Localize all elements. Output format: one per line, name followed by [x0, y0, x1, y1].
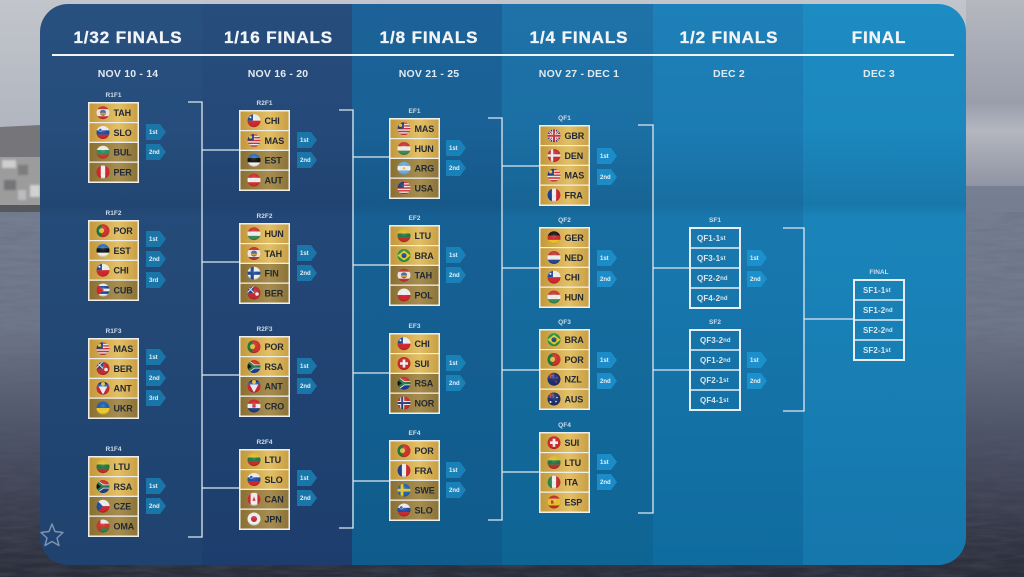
match EF4: SWE: [414, 486, 435, 496]
match R1F1: TAH: [114, 108, 131, 118]
match FINAL: st: [885, 288, 891, 294]
match QF1: MAS: [564, 170, 584, 180]
match FINAL: SF2-1: [863, 346, 885, 355]
match SF1: QF1-1: [697, 234, 720, 243]
match R1F1: BUL: [114, 148, 132, 158]
qualifier badges: EF1: [446, 140, 466, 176]
match EF2: BRA: [414, 251, 434, 261]
match R1F4: LTU: [114, 462, 130, 472]
connector: 1/8 to 1/4: [488, 118, 539, 520]
qualifier badges: QF4: 1st: [600, 460, 609, 466]
qualifier badges: EF2: 2nd: [449, 273, 460, 279]
qualifier badges: EF1: 2nd: [449, 166, 460, 172]
qualifier badges: SF2: 1st: [750, 358, 759, 364]
match QF2: [539, 217, 590, 308]
qualifier badges: R2F2: [297, 245, 317, 281]
qualifier badges: QF1: [597, 148, 617, 185]
match SF1: st: [720, 236, 726, 242]
match FINAL: FINAL: [869, 269, 889, 276]
column band: 1/4 finals: [502, 4, 653, 565]
match QF4: LTU: [564, 458, 581, 468]
match QF3: QF3: [558, 319, 571, 326]
match SF2: st: [723, 378, 729, 384]
match QF4: [539, 422, 590, 513]
qualifier badges: SF2: [747, 352, 767, 389]
qualifier badges: EF3: 2nd: [449, 381, 460, 387]
match FINAL: nd: [885, 308, 893, 314]
match QF2: NED: [564, 253, 584, 263]
heading: final: FINAL: [852, 28, 906, 47]
match FINAL: [854, 269, 904, 360]
match QF3: AUS: [564, 394, 583, 404]
match R2F1: AUT: [264, 175, 283, 185]
match R2F3: ANT: [264, 382, 283, 392]
qualifier badges: EF2: 1st: [449, 253, 458, 259]
match QF4: SUI: [564, 438, 579, 448]
qualifier badges: QF3: [597, 352, 617, 389]
match R1F4: RSA: [114, 482, 133, 492]
match QF1: GBR: [564, 131, 585, 141]
match R2F4: CAN: [264, 494, 284, 504]
match QF1: DEN: [564, 151, 583, 161]
qualifier badges: EF1: 1st: [449, 146, 458, 152]
match SF1: st: [720, 256, 726, 262]
match EF2: EF2: [409, 215, 421, 222]
match R1F4: CZE: [114, 502, 131, 512]
match QF3: [539, 319, 590, 410]
match SF1: [690, 217, 740, 308]
heading: 1/16 finals: 1/16 FINALS: [224, 28, 333, 47]
match R2F3: RSA: [264, 362, 284, 372]
qualifier badges: QF2: 2nd: [600, 277, 611, 283]
match SF2: [690, 319, 740, 410]
match R2F4: R2F4: [257, 439, 273, 446]
match SF1: QF2-2: [697, 274, 720, 283]
match SF1: QF3-1: [697, 254, 720, 263]
connector: 1/2 to final: [783, 228, 853, 411]
heading: 1/32 finals: 1/32 FINALS: [73, 28, 183, 47]
match R2F2: HUN: [264, 229, 284, 239]
match EF3: SUI: [414, 359, 429, 369]
match R2F3: CRO: [264, 401, 284, 411]
match R1F3: BER: [114, 364, 133, 374]
see-through hillside: [354, 169, 966, 211]
qualifier badges: R2F2: 1st: [300, 251, 309, 257]
date: final: DEC 3: [863, 68, 895, 80]
match QF3: POR: [564, 355, 584, 365]
qualifier badges: SF1: 2nd: [750, 277, 761, 283]
match FINAL: nd: [885, 328, 893, 334]
match QF4: ESP: [564, 497, 582, 507]
match EF3: CHI: [414, 339, 430, 349]
column band: final: [803, 4, 966, 565]
match R2F4: LTU: [264, 455, 281, 465]
date: 1/16 finals: NOV 16 - 20: [248, 68, 308, 80]
connector: 1/16 to 1/8: [339, 110, 389, 528]
icon: star logo: [41, 524, 63, 546]
column band: 1/2 finals: [653, 4, 803, 565]
qualifier badges: R1F3: [146, 349, 166, 406]
heading: 1/8 finals: 1/8 FINALS: [380, 28, 478, 47]
match EF4: [389, 430, 440, 521]
qualifier badges: QF3: 1st: [600, 358, 609, 364]
match SF2: QF3-2: [700, 336, 723, 345]
header rule: [52, 54, 954, 56]
match EF4: FRA: [414, 466, 433, 476]
qualifier badges: SF1: 1st: [750, 256, 759, 262]
match FINAL: SF2-2: [863, 326, 885, 335]
match EF3: EF3: [409, 323, 421, 330]
match R1F1: R1F1: [106, 92, 122, 99]
match SF2: QF2-1: [700, 376, 723, 385]
match R1F1: SLO: [114, 128, 132, 138]
qualifier badges: EF4: 2nd: [449, 488, 460, 494]
match R1F3: R1F3: [106, 328, 122, 335]
match R2F1: CHI: [264, 116, 280, 126]
match R2F2: [239, 213, 290, 304]
match EF2: [389, 215, 440, 306]
qualifier badges: EF3: 1st: [449, 361, 458, 367]
qualifier badges: R1F3: 2nd: [149, 376, 160, 382]
match R1F4: OMA: [114, 521, 135, 531]
date: 1/8 finals: NOV 21 - 25: [399, 68, 459, 80]
match R1F1: PER: [114, 167, 132, 177]
match R2F2: TAH: [264, 249, 282, 259]
match QF2: GER: [564, 233, 584, 243]
match R2F3: R2F3: [257, 326, 273, 333]
match FINAL: st: [885, 348, 891, 354]
column band: 1/16 finals: [202, 4, 352, 565]
match EF2: POL: [414, 290, 433, 300]
qualifier badges: R1F1: 2nd: [149, 150, 160, 156]
match R1F4: [88, 446, 139, 537]
qualifier badges: R2F1: 2nd: [300, 158, 311, 164]
match QF1: QF1: [558, 115, 571, 122]
qualifier badges: SF1: [747, 250, 767, 287]
match R2F2: BER: [264, 288, 284, 298]
qualifier badges: R1F2: 1st: [149, 237, 158, 243]
date: 1/4 finals: NOV 27 - DEC 1: [539, 68, 619, 80]
match R2F1: [239, 100, 290, 191]
qualifier badges: R1F4: 2nd: [149, 504, 160, 510]
match QF2: HUN: [564, 292, 584, 302]
qualifier badges: R1F2: [146, 231, 166, 288]
match R1F2: R1F2: [106, 210, 122, 217]
qualifier badges: R2F4: 1st: [300, 476, 309, 482]
heading: 1/2 finals: 1/2 FINALS: [680, 28, 778, 47]
match SF2: QF1-2: [700, 356, 723, 365]
match R1F2: CUB: [114, 285, 133, 295]
qualifier badges: R2F4: [297, 470, 317, 506]
qualifier badges: R1F2: 3rd: [149, 278, 159, 284]
match R1F2: CHI: [114, 266, 129, 276]
qualifier badges: R1F1: [146, 124, 166, 160]
match SF1: nd: [720, 296, 728, 302]
match QF2: QF2: [558, 217, 571, 224]
qualifier badges: QF3: 2nd: [600, 379, 611, 385]
qualifier badges: R2F1: [297, 132, 317, 168]
match R2F1: EST: [264, 156, 282, 166]
match R1F1: [88, 92, 139, 183]
match R1F3: ANT: [114, 384, 132, 394]
match SF1: SF1: [709, 217, 721, 224]
qualifier badges: QF4: 2nd: [600, 480, 611, 486]
qualifier badges: R2F3: 2nd: [300, 384, 311, 390]
qualifier badges: EF3: [446, 355, 466, 391]
match R2F4: SLO: [264, 475, 283, 485]
match QF2: CHI: [564, 272, 580, 282]
column band: 1/8 finals: [352, 4, 502, 565]
qualifier badges: R1F4: 1st: [149, 484, 158, 490]
match R1F2: POR: [114, 226, 133, 236]
connector: 1/32 to 1/16: [188, 102, 239, 537]
qualifier badges: QF2: [597, 250, 617, 287]
qualifier badges: R1F4: [146, 478, 166, 514]
match EF1: MAS: [414, 124, 434, 134]
match FINAL: SF1-1: [863, 286, 885, 295]
qualifier badges: R1F3: 3rd: [149, 396, 159, 402]
qualifier badges: R1F3: 1st: [149, 355, 158, 361]
match SF1: QF4-2: [697, 294, 720, 303]
qualifier badges: EF4: 1st: [449, 468, 458, 474]
qualifier badges: EF4: [446, 462, 466, 498]
match EF1: HUN: [414, 144, 434, 154]
match EF2: LTU: [414, 231, 431, 241]
match R2F4: JPN: [264, 514, 282, 524]
match QF4: ITA: [564, 478, 579, 488]
match QF3: BRA: [564, 335, 584, 345]
match EF1: [389, 108, 440, 199]
match R2F1: R2F1: [257, 100, 273, 107]
qualifier badges: R2F3: [297, 358, 317, 394]
match R2F2: FIN: [264, 268, 279, 278]
qualifier badges: QF1: 1st: [600, 154, 609, 160]
match EF1: USA: [414, 183, 434, 193]
match EF4: POR: [414, 446, 434, 456]
match R1F3: UKR: [114, 403, 133, 413]
match SF2: nd: [723, 338, 731, 344]
match EF2: TAH: [414, 270, 432, 280]
qualifier badges: SF2: 2nd: [750, 379, 761, 385]
match QF1: [539, 115, 590, 206]
match SF2: QF4-1: [700, 396, 723, 405]
connector: 1/4 to 1/2: [638, 125, 689, 513]
match EF4: EF4: [409, 430, 421, 437]
qualifier badges: R2F3: 1st: [300, 364, 309, 370]
qualifier badges: R1F1: 1st: [149, 130, 158, 136]
qualifier badges: QF1: 2nd: [600, 175, 611, 181]
match R1F3: [88, 328, 139, 419]
match SF2: nd: [723, 358, 731, 364]
match R2F2: R2F2: [257, 213, 273, 220]
match EF3: RSA: [414, 378, 434, 388]
match R2F4: [239, 439, 290, 530]
match SF2: SF2: [709, 319, 721, 326]
qualifier badges: QF4: [597, 454, 617, 490]
heading: 1/4 finals: 1/4 FINALS: [530, 28, 628, 47]
match SF2: st: [723, 398, 729, 404]
match R2F1: MAS: [264, 136, 284, 146]
match EF3: NOR: [414, 398, 435, 408]
match R1F4: R1F4: [106, 446, 122, 453]
date: 1/2 finals: DEC 2: [713, 68, 745, 80]
match SF1: nd: [720, 276, 728, 282]
match R1F3: MAS: [114, 344, 133, 354]
match FINAL: SF1-2: [863, 306, 885, 315]
qualifier badges: R2F1: 1st: [300, 138, 309, 144]
match R1F2: EST: [114, 246, 131, 256]
match R1F2: [88, 210, 139, 301]
match R2F3: POR: [264, 342, 284, 352]
match QF4: QF4: [558, 422, 571, 429]
match QF3: NZL: [564, 374, 582, 384]
qualifier badges: R2F2: 2nd: [300, 271, 311, 277]
qualifier badges: EF2: [446, 247, 466, 283]
column band: 1/32 finals: [40, 4, 202, 565]
date: 1/32 finals: NOV 10 - 14: [98, 68, 158, 80]
qualifier badges: R2F4: 2nd: [300, 496, 311, 502]
match EF4: SLO: [414, 505, 433, 515]
match EF1: EF1: [409, 108, 421, 115]
match EF1: ARG: [414, 164, 434, 174]
match EF3: [389, 323, 440, 414]
qualifier badges: R1F2: 2nd: [149, 257, 160, 263]
qualifier badges: QF2: 1st: [600, 256, 609, 262]
match QF1: FRA: [564, 190, 583, 200]
match R2F3: [239, 326, 290, 417]
